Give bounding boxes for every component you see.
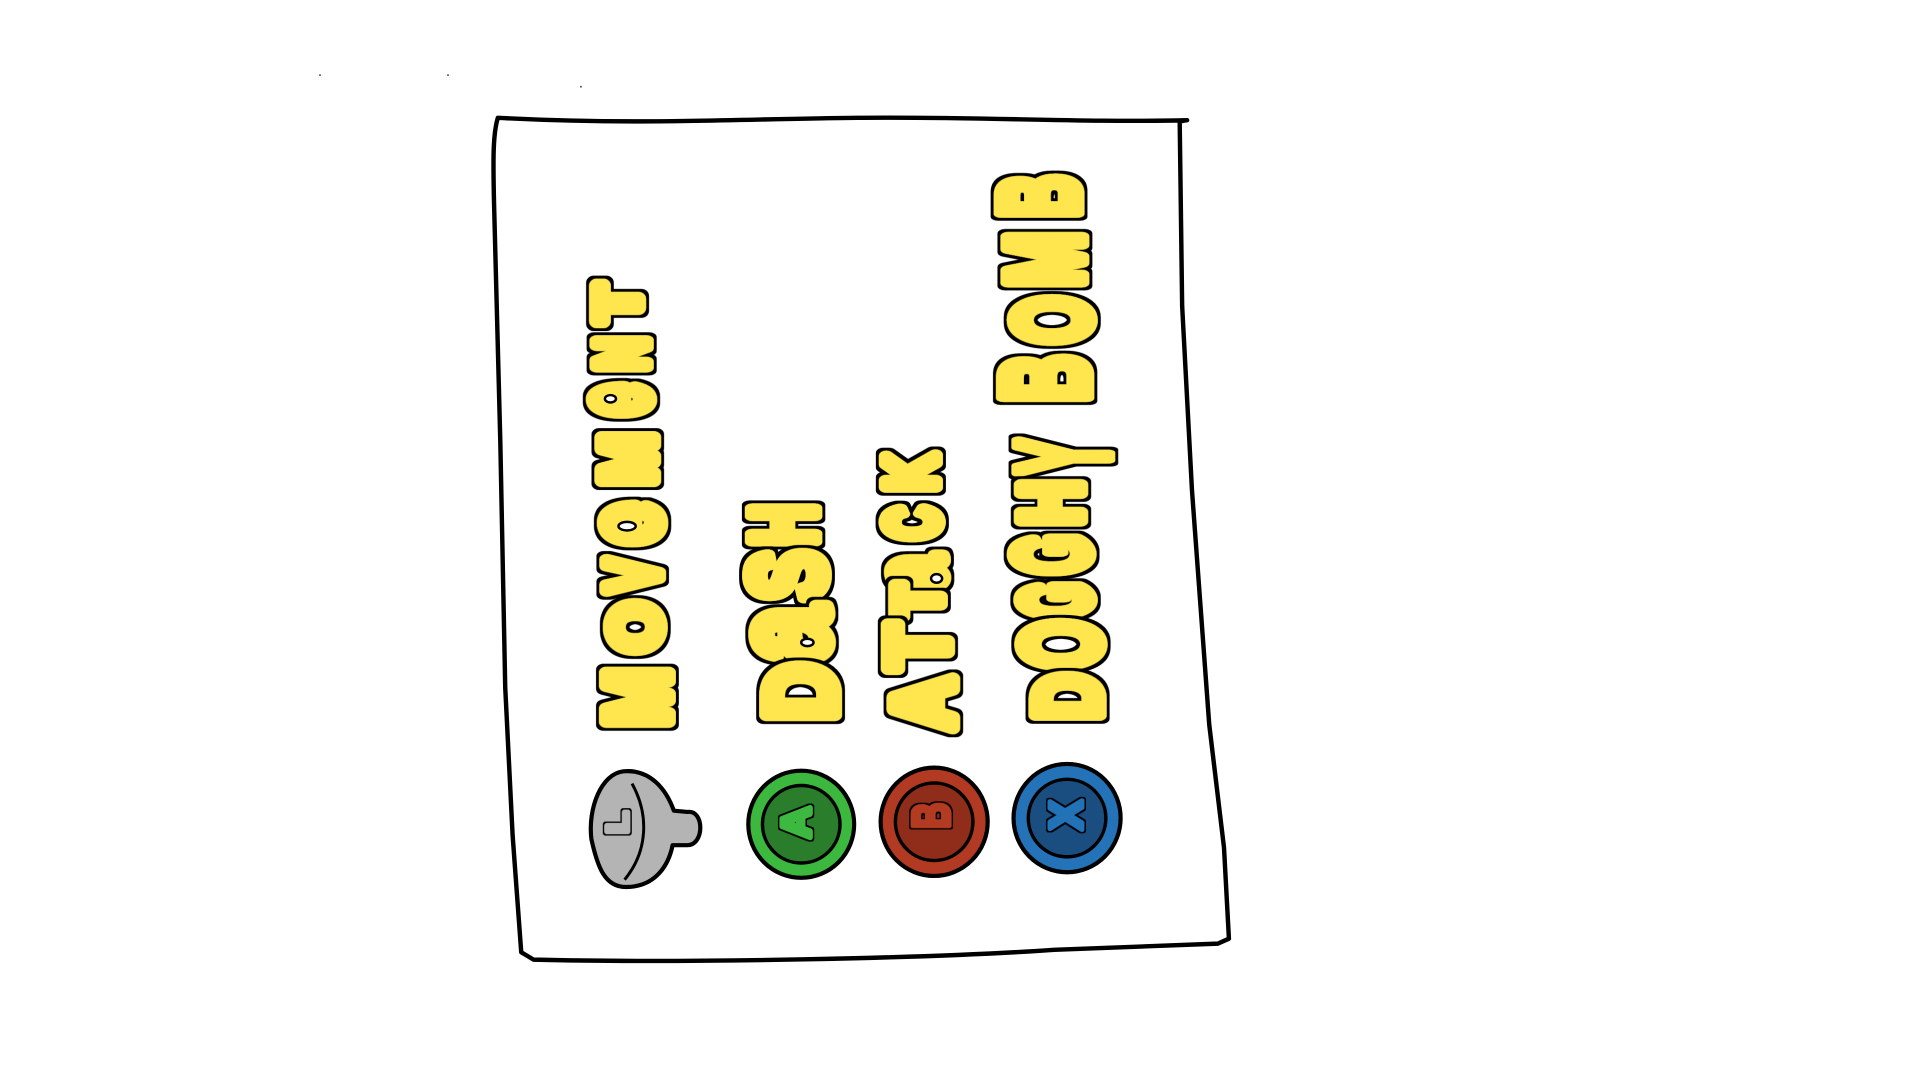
label: Attack: T xyxy=(881,584,954,617)
icon: B button: B xyxy=(902,803,960,829)
label: Attack: a xyxy=(857,554,964,590)
icon: L analog stick xyxy=(591,771,700,887)
label: Dash: D xyxy=(746,663,856,720)
label: Dogghy Bomb: G xyxy=(993,534,1111,575)
label: Dogghy Bomb: D xyxy=(1017,673,1119,720)
icon: X button: X xyxy=(1040,800,1092,830)
label: Dogghy Bomb xyxy=(977,175,1136,720)
icon: X button xyxy=(1014,764,1121,872)
label: Dogghy Bomb: Y xyxy=(992,439,1136,475)
label: Movement: M xyxy=(586,433,670,485)
label: Attack xyxy=(857,454,971,730)
icon: L analog stick: L xyxy=(600,811,635,834)
label: Dogghy Bomb: B xyxy=(977,355,1113,402)
label: Attack: A xyxy=(876,677,971,730)
label: Dogghy Bomb: M xyxy=(985,232,1105,287)
label: Dogghy Bomb: O xyxy=(992,296,1112,344)
label: Movement: O xyxy=(596,602,675,652)
label: Movement: e xyxy=(566,503,682,545)
label: Dogghy Bomb: O xyxy=(1000,619,1123,669)
label: Dash: S xyxy=(729,550,847,600)
icon: A button: A xyxy=(773,807,819,839)
letter counter marks xyxy=(605,395,942,646)
label: Dogghy Bomb: B xyxy=(978,175,1101,218)
label: Movement: T xyxy=(584,285,653,322)
label: Attack: C xyxy=(871,507,954,540)
label: Dogghy Bomb: H xyxy=(1004,480,1100,525)
label: Movement: M xyxy=(588,668,688,727)
label: Movement: V xyxy=(591,559,675,592)
label: Dash: H xyxy=(734,504,835,546)
label: Movement: N xyxy=(582,337,662,371)
sheet contents xyxy=(493,118,1229,961)
label: Attack: T xyxy=(871,624,967,669)
label: Attack: K xyxy=(872,454,952,491)
label: Dogghy Bomb: G xyxy=(1000,582,1110,618)
panel: sketched frame xyxy=(493,118,1229,961)
icon: A button xyxy=(748,771,854,878)
label: Movement: e xyxy=(555,383,671,417)
label: Dash: a xyxy=(708,605,856,662)
label: Movement xyxy=(555,285,688,727)
icon: B button xyxy=(881,768,988,876)
label: Dash xyxy=(708,504,856,720)
